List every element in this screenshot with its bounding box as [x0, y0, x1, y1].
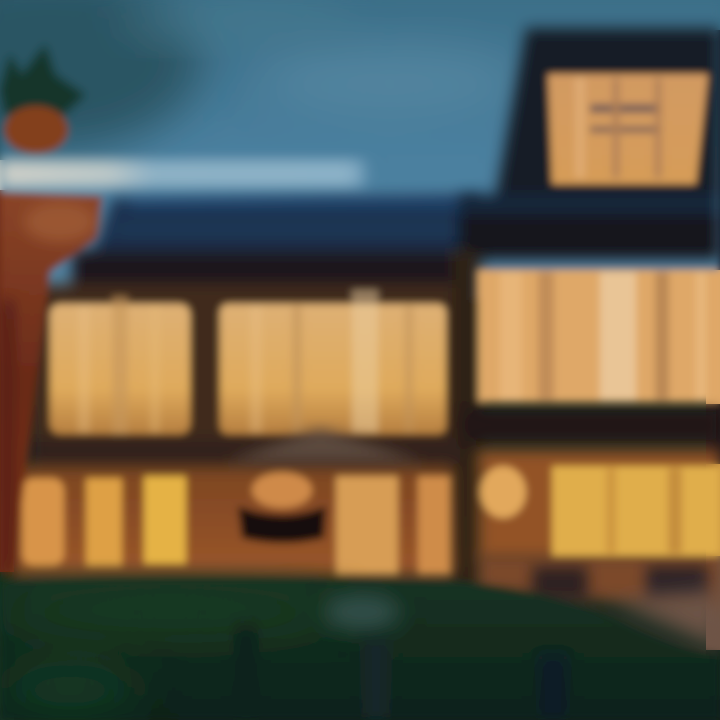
solar panel roof	[92, 194, 480, 258]
plant in pot	[0, 45, 85, 154]
sky background	[0, 0, 720, 300]
dark shrubs under right windows	[532, 566, 708, 602]
dark upper gable on right	[460, 28, 720, 260]
lower storey right wall	[478, 450, 720, 610]
upper right window	[478, 270, 720, 402]
garden path glimpse	[610, 590, 720, 648]
tree trunk on left	[0, 192, 102, 572]
upper centre window	[220, 290, 446, 434]
foreground hedge	[0, 576, 720, 720]
upper storey wall and eaves	[30, 250, 480, 590]
lower right windows	[480, 466, 720, 556]
glowing arch with dark awning	[238, 472, 326, 543]
lower storey left wall	[12, 428, 454, 576]
gable window	[548, 74, 708, 184]
cloud band on horizon	[0, 160, 365, 188]
lower left windows	[22, 476, 450, 574]
upper left window	[50, 296, 190, 434]
right floor band	[462, 408, 720, 442]
